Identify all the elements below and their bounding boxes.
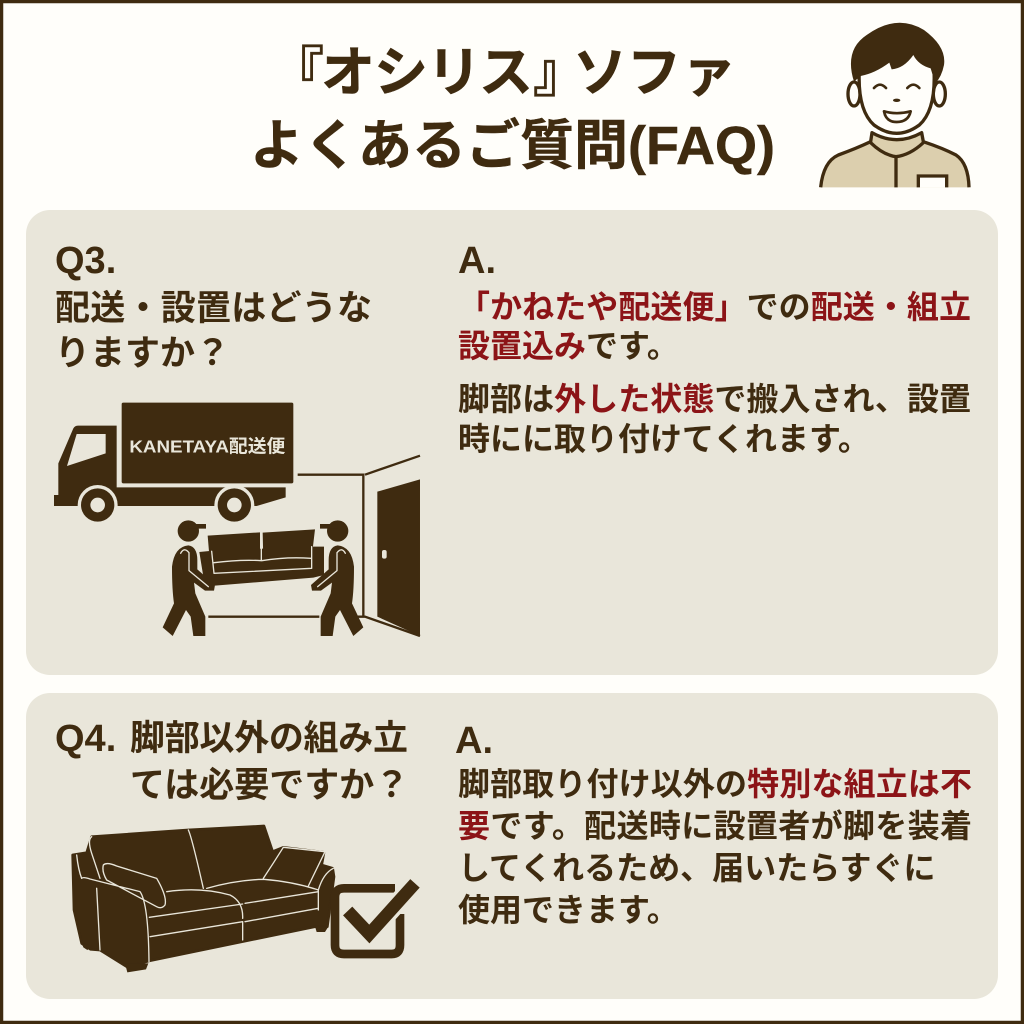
check mark box bbox=[335, 883, 415, 954]
Q4 answer: A. bbox=[455, 720, 493, 762]
Q3 question bbox=[55, 240, 372, 373]
title: 『オシリス』ソファ bbox=[270, 43, 736, 103]
truck: KANETAYA配送便 bbox=[129, 437, 285, 457]
Q3 answer: 脚部は外した状態で搬入され、設置 bbox=[458, 381, 971, 417]
Q4 answer: 脚部取り付け以外の特別な組立は不 bbox=[458, 766, 972, 802]
illustration: delivery truck and movers bbox=[54, 403, 420, 636]
mover left bbox=[163, 520, 215, 636]
Q4 question: 脚部以外の組み立 bbox=[130, 719, 408, 758]
room and door bbox=[208, 456, 420, 636]
Q3 answer bbox=[458, 240, 971, 457]
Q4 answer bbox=[455, 720, 972, 928]
Q3 answer: 「かねたや配送便」での配送・組立 bbox=[458, 289, 971, 325]
Q4 answer: 要です。配送時に設置者が脚を装着 bbox=[458, 808, 972, 844]
panel: Q3 bbox=[26, 210, 998, 675]
Q4 answer: 使用できます。 bbox=[458, 892, 679, 928]
Q4 question: ては必要ですか？ bbox=[130, 766, 409, 805]
Q3 question: Q3. bbox=[55, 240, 116, 282]
Q4 answer: してくれるため、届いたらすぐに bbox=[458, 850, 935, 886]
mover right bbox=[311, 520, 363, 636]
panel: Q4 bbox=[26, 693, 998, 999]
Q3 answer: A. bbox=[458, 240, 496, 282]
Q3 answer: 設置込みです。 bbox=[458, 328, 679, 364]
icon: smiling staff member bbox=[821, 23, 969, 187]
sofa bbox=[73, 826, 334, 972]
Q4 question: Q4. bbox=[55, 718, 116, 760]
title bbox=[250, 43, 775, 176]
Q3 answer: 時にに取り付けてくれます。 bbox=[458, 421, 870, 457]
title: よくあるご質問(FAQ) bbox=[250, 116, 775, 176]
Q4 question bbox=[55, 718, 409, 805]
Q3 question: りますか？ bbox=[55, 334, 230, 373]
Q3 question: 配送・設置はどうな bbox=[55, 289, 372, 328]
sofa being carried bbox=[199, 529, 324, 586]
illustration: sofa with check mark bbox=[73, 826, 415, 972]
truck bbox=[54, 403, 293, 525]
